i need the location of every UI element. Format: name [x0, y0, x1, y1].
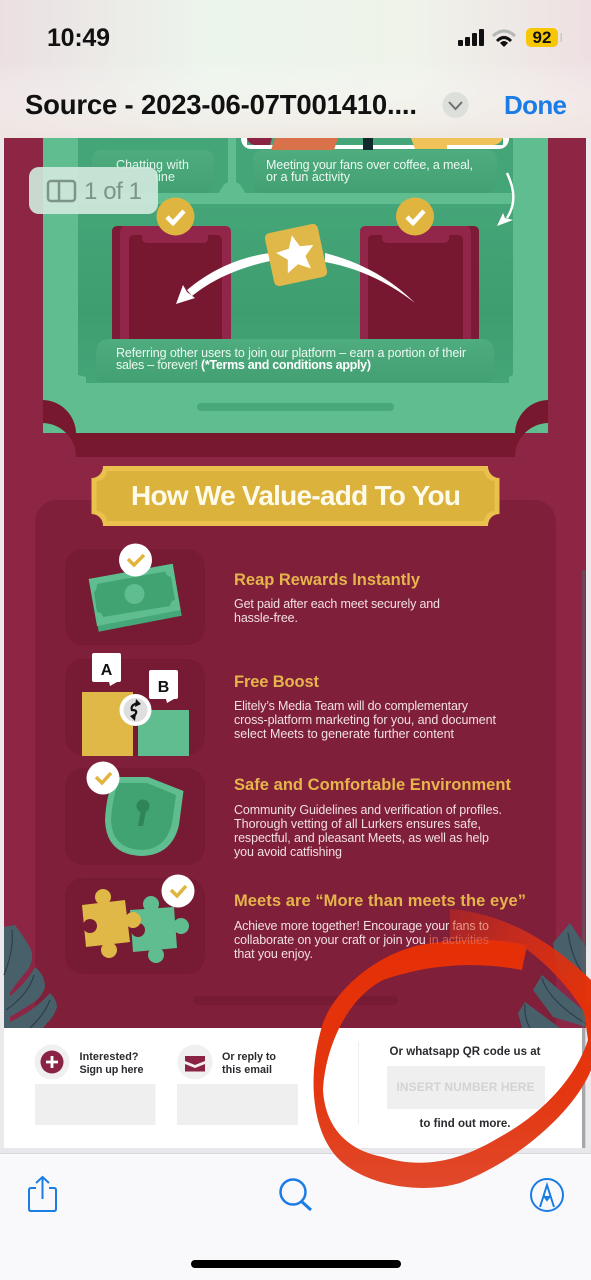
body: meets text over the scribble: Achieve more together! Encourage your fans to [234, 919, 489, 933]
ring stroke [314, 940, 591, 1188]
infographic crimson sheet [4, 138, 586, 1028]
body: cross-platform marketing for you, and document [234, 713, 497, 727]
body: meets text over the scribble [234, 919, 489, 961]
body [234, 699, 497, 741]
arrow: referral arc [176, 253, 415, 304]
panel: footer contact strip [4, 1028, 586, 1148]
check badge right [396, 198, 434, 236]
battery [526, 28, 562, 47]
illustration: left leaf [4, 925, 57, 1028]
heading: Meets are “More than meets the eye” [234, 892, 526, 910]
body: you avoid catfishing [234, 845, 342, 859]
check badge left [156, 198, 194, 236]
text: reply: this email [222, 1064, 272, 1076]
icon: sign up plus [34, 1044, 70, 1080]
body: Get paid after each meet securely and [234, 597, 440, 611]
icon: green puzzle piece [130, 896, 189, 963]
phone left [112, 226, 231, 339]
icon: share [29, 1177, 56, 1211]
icon: yellow puzzle piece [82, 889, 141, 958]
item: reap rewards [65, 544, 440, 645]
icon: check badge [119, 544, 152, 576]
document title: Source - 2023-06-07T001410.... [25, 89, 417, 120]
home indicator [191, 1260, 401, 1268]
done button: Done [504, 90, 567, 120]
icon: wifi [493, 31, 515, 47]
number box: INSERT NUMBER HERE [396, 1080, 534, 1094]
caption: referring: (*Terms and conditions apply) [201, 358, 371, 372]
icon: markup pen [531, 1179, 563, 1211]
fading upper stroke [450, 909, 591, 1024]
phone right [360, 226, 479, 339]
body: respectful, and pleasant Meets, as well as help [234, 831, 489, 845]
heading: Safe and Comfortable Environment [234, 776, 512, 794]
caption: referring [96, 339, 494, 382]
icon: check badge [162, 874, 194, 908]
upper dark green area [78, 138, 513, 193]
illustration: right leaf [518, 923, 586, 1028]
icon: sidebar [48, 181, 75, 201]
caption: chatting: Chatting with [116, 158, 189, 172]
panel: green offer board [43, 138, 548, 457]
red hand-drawn circle [314, 909, 591, 1188]
text: sign up: Interested? [80, 1051, 138, 1063]
heading: Reap Rewards Instantly [234, 571, 421, 589]
text: sign up [80, 1051, 144, 1076]
caption: meeting fans: or a fun activity [266, 170, 351, 184]
caption: meeting fans [253, 150, 497, 193]
icon: A and B bars: B [158, 679, 169, 696]
caption: referring: Referring other users to join our platform – earn a portion of their [116, 346, 466, 360]
icon: signal [458, 29, 484, 46]
top navigation bar [0, 0, 591, 138]
item: safe environment [65, 762, 512, 865]
bottom toolbar [0, 1148, 591, 1280]
body [234, 803, 502, 859]
text: sign up: Sign up here [80, 1064, 144, 1076]
body: Thorough vetting of all Lurkers ensures safe, [234, 817, 481, 831]
caption: meeting fans: Meeting your fans over coffee, a meal, [266, 158, 473, 172]
body: meets text over the scribble: collaborate on your craft or join you in activities [234, 933, 489, 947]
scroll pill green [197, 403, 394, 411]
status time: 10:49 [47, 24, 110, 52]
page count badge [29, 167, 158, 214]
body: Elitely’s Media Team will do complementary [234, 699, 469, 713]
icon: A and B bars [82, 653, 189, 756]
icon: check badge [86, 762, 120, 794]
body: Community Guidelines and verification of profiles. [234, 803, 502, 817]
caption: chatting [92, 150, 214, 193]
number box [387, 1066, 545, 1109]
icon: A and B bars: A [101, 662, 113, 679]
item: more than meets the eye [65, 874, 526, 974]
heading text: How We Value-add To You [131, 480, 461, 511]
panel: value-add background [35, 500, 556, 1060]
body: meets text over the scribble: that you enjoy. [234, 947, 313, 961]
icon: shield [105, 777, 184, 856]
icon: email envelope [178, 1044, 212, 1080]
heading: Free Boost [234, 673, 320, 691]
divider pillar [219, 138, 245, 193]
text: reply [222, 1051, 276, 1076]
arrow: curved down [497, 173, 513, 226]
body [234, 597, 440, 625]
body: select Meets to generate further content [234, 727, 455, 741]
item: free boost [65, 653, 497, 756]
text: whatsapp: Or whatsapp QR code us at [390, 1046, 541, 1058]
text: find out more: to find out more. [420, 1118, 510, 1130]
scrollbar [582, 570, 586, 1149]
icon: search [280, 1180, 311, 1210]
page count badge: 1 of 1 [84, 178, 142, 205]
email blank box [177, 1084, 298, 1125]
star tile [264, 223, 328, 287]
icon: chevron button [442, 92, 468, 118]
caption: referring: sales – forever! [116, 358, 198, 372]
heading banner [92, 466, 500, 526]
caption: chatting: line [155, 170, 175, 184]
inner dark green area [78, 204, 513, 383]
scroll pill crimson [193, 996, 398, 1005]
body: hassle-free. [234, 611, 298, 625]
sign up blank box [35, 1084, 156, 1125]
photo frame cropped at top [241, 138, 509, 150]
icon: banknote [89, 564, 182, 632]
corner scallops and shadow band [43, 400, 548, 457]
text: reply: Or reply to [222, 1051, 276, 1063]
battery: 92 [533, 28, 551, 47]
